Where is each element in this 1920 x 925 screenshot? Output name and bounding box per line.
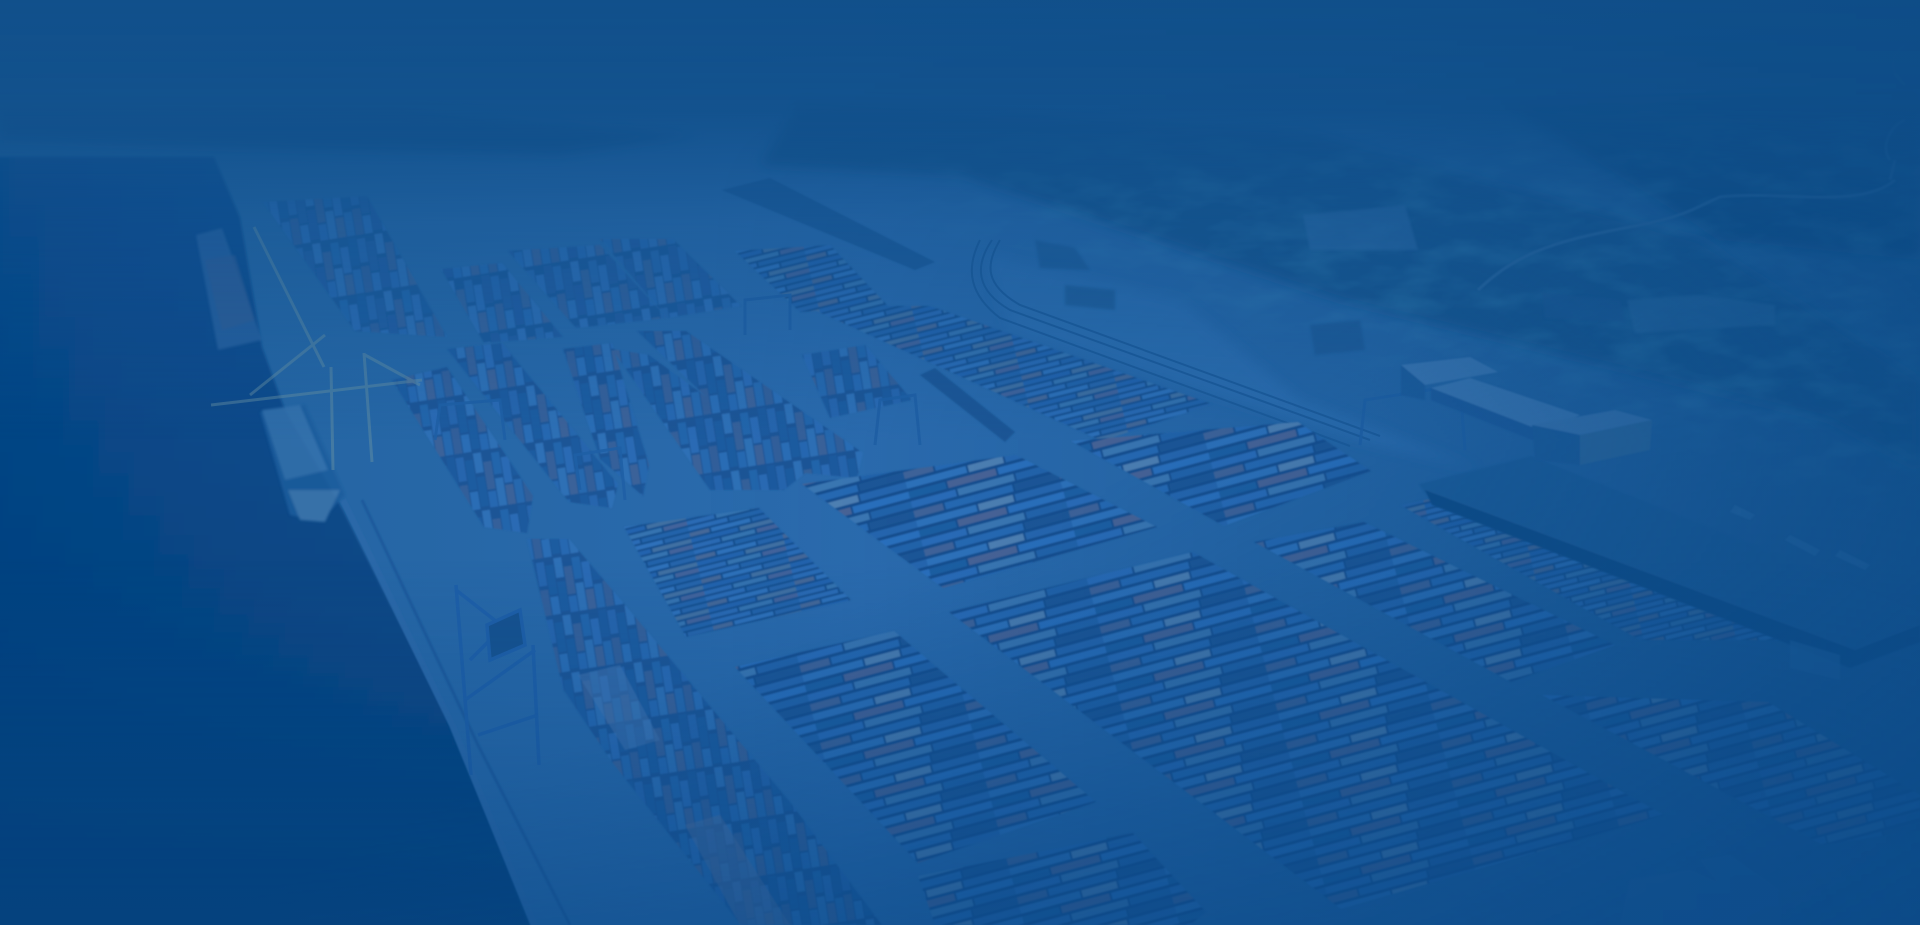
water with shoreline <box>0 157 533 925</box>
tint: right fade <box>700 0 1920 925</box>
buildings near warehouse <box>1401 357 1652 465</box>
ship moored north <box>196 228 262 350</box>
yard block G <box>918 833 1206 925</box>
yard block D <box>802 455 1157 588</box>
rail curve <box>972 240 1380 446</box>
yard block E <box>624 508 851 637</box>
big yard block A <box>949 552 1664 909</box>
right block B2 <box>1542 695 1920 845</box>
south east buildings <box>1620 640 1840 925</box>
upper right road network <box>1478 45 1905 290</box>
container yards <box>263 178 1920 925</box>
right block B <box>1254 522 1615 682</box>
warehouse with long roof <box>1419 456 1920 668</box>
dark rail and vegetation corridor <box>0 90 1920 470</box>
tint: bottom fade <box>0 560 1920 925</box>
far buildings <box>1035 205 1775 355</box>
tint: top haze <box>0 0 1920 440</box>
rubber tyre gantries <box>435 295 1465 500</box>
far rows <box>722 178 935 270</box>
narrow right rows <box>1400 495 1780 640</box>
ship moored south <box>260 405 345 522</box>
yard: light apron along rail line <box>985 255 1480 470</box>
quay edge <box>343 500 570 925</box>
coast stack <box>527 539 882 925</box>
south quay crane <box>456 585 539 775</box>
mottled terrain texture over far land <box>1266 232 1756 388</box>
yard block C <box>1071 422 1371 526</box>
far north stacks <box>263 196 447 337</box>
north quay crane <box>211 227 422 470</box>
yard block F <box>735 631 1096 863</box>
